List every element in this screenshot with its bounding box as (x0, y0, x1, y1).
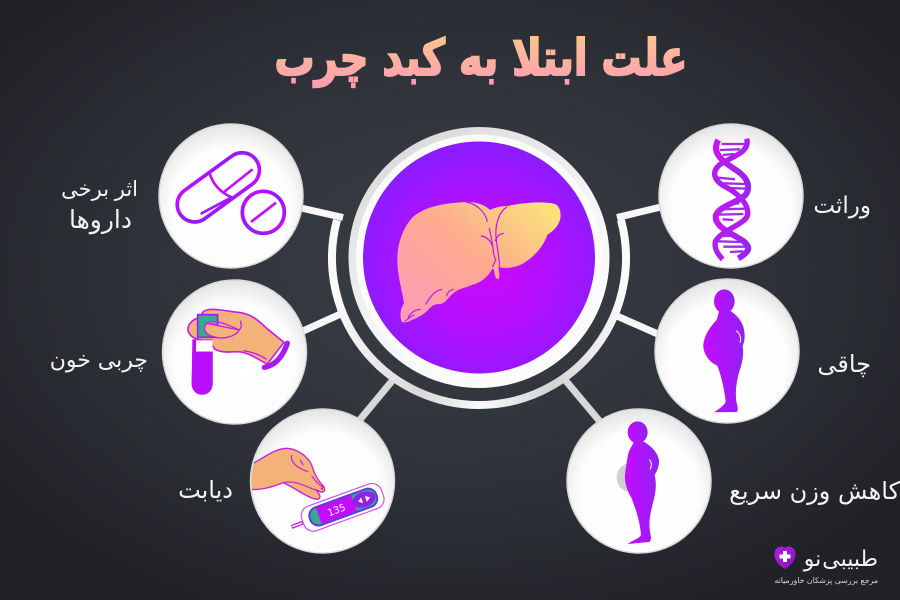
label: medication effects (61, 177, 138, 235)
icon: DNA helix (715, 139, 748, 259)
icon: hand and glucose meter (250, 448, 387, 534)
central liver medallion (348, 127, 610, 388)
glove cuff (264, 343, 287, 367)
label: heredity: وراثت (813, 193, 871, 219)
icon: slimming silhouette (617, 421, 659, 544)
label: medication effects: داروها (69, 205, 132, 235)
connectors and outer arc (301, 207, 661, 424)
test tube (192, 339, 213, 395)
label: obesity: چاقی (817, 350, 871, 378)
panel: medication (159, 124, 303, 268)
label: medication effects: اثر برخی (61, 177, 138, 201)
panel: diabetes (250, 409, 394, 553)
tube cap (198, 315, 218, 337)
icon: heart with plus (774, 546, 796, 569)
logo: طبیبی نو (803, 547, 878, 572)
label: blood lipids: چربی خون (50, 348, 148, 373)
label: diabetes: دیابت (178, 476, 233, 504)
logo: مرجع بررسی پزشکان خاورمیانه (774, 576, 878, 585)
icon: liver (397, 202, 561, 322)
panel: obesity (655, 279, 799, 423)
icon: hand holding test tube (188, 309, 287, 395)
panel: blood lipids (162, 280, 306, 424)
panel: rapid weight loss (567, 409, 711, 553)
title: علت ابتلا به کبد چرب (275, 29, 687, 87)
thumb (205, 321, 241, 338)
icon: hand and glucose meter: 135 (326, 502, 347, 519)
logo (774, 546, 878, 585)
panel: heredity (659, 124, 803, 268)
icon: pills (170, 146, 284, 233)
label: rapid weight loss: کاهش وزن سریع (729, 477, 900, 505)
icon: obese silhouette (703, 289, 745, 412)
